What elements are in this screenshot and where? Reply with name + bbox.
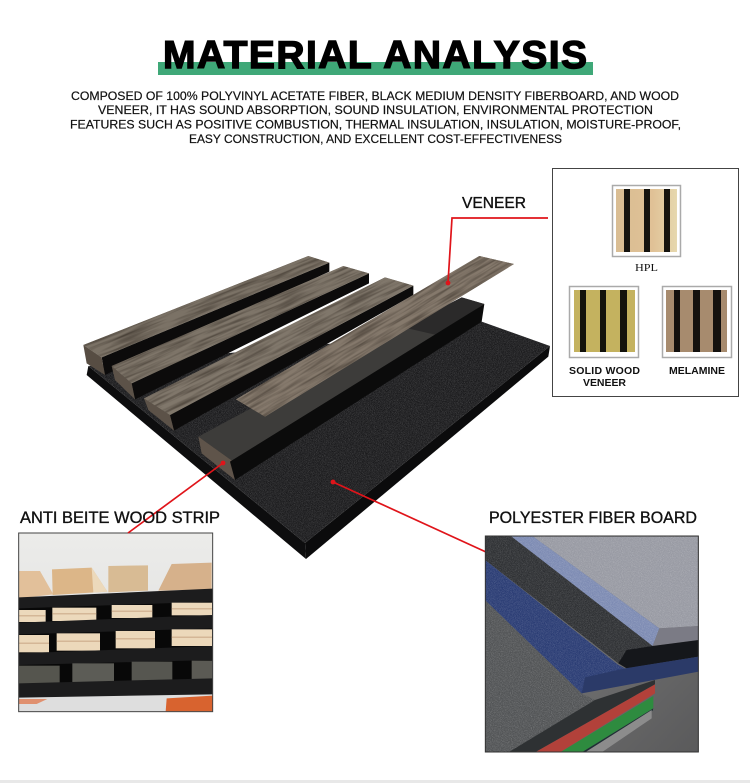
- product photo: acoustic panel sample: [83, 256, 550, 559]
- title: [158, 34, 593, 77]
- swatch: melamine: [662, 286, 732, 358]
- callout: veneer: [446, 195, 548, 285]
- photo: stacked fiber boards: [485, 536, 699, 752]
- plywood ply lines: [19, 608, 212, 644]
- label: solid wood veneer: [569, 365, 640, 389]
- polyester felt backing board: [87, 322, 550, 559]
- label: polyester fiber board: POLYESTER FIBER BOARD: [489, 509, 697, 527]
- intro text block: [70, 89, 681, 146]
- leader line: wood strip: [128, 461, 225, 533]
- slat 4: peeled veneer layer: [236, 256, 514, 416]
- label: HPL: HPL: [635, 263, 658, 274]
- slat 4: exposed core: [198, 297, 484, 480]
- veneer leader line: [446, 218, 548, 285]
- label: melamine: MELAMINE: [669, 365, 725, 377]
- intro text block: VENEER, IT HAS SOUND ABSORPTION, SOUND INSULATION, ENVIRONMENTAL PROTECTION: [98, 103, 653, 117]
- panel: polyester fiber board: [331, 480, 699, 752]
- slat 1: [83, 256, 330, 375]
- swatch: HPL: [612, 186, 680, 256]
- label: anti beite wood strip: ANTI BEITE WOOD STRIP: [20, 509, 220, 527]
- plywood row 2: [19, 629, 212, 652]
- photo: wood strip cross sections: [18, 533, 213, 712]
- title underline bar: [158, 62, 593, 75]
- intro text block: EASY CONSTRUCTION, AND EXCELLENT COST-EFFECTIVENESS: [189, 132, 562, 146]
- title text: MATERIAL ANALYSIS: [163, 34, 587, 77]
- intro text block: COMPOSED OF 100% POLYVINYL ACETATE FIBER, BLACK MEDIUM DENSITY FIBERBOARD, AND WOOD: [71, 89, 679, 103]
- leader line: fiber board: [331, 480, 486, 552]
- bottom band: [0, 780, 750, 783]
- swatch: solid wood veneer: [570, 286, 638, 358]
- slat 3: [144, 277, 414, 430]
- panel: veneer options: [552, 168, 738, 396]
- intro text block: FEATURES SUCH AS POSITIVE COMBUSTION, THERMAL INSULATION, INSULATION, MOISTURE-PROOF,: [70, 118, 681, 132]
- plywood row 1: [19, 603, 212, 622]
- veneer label: VENEER: [462, 195, 526, 212]
- panel: anti beite wood strip: [18, 461, 225, 712]
- label: solid wood veneer: VENEER: [583, 377, 626, 389]
- slat 2: [112, 266, 369, 400]
- label: solid wood veneer: SOLID WOOD: [569, 365, 640, 377]
